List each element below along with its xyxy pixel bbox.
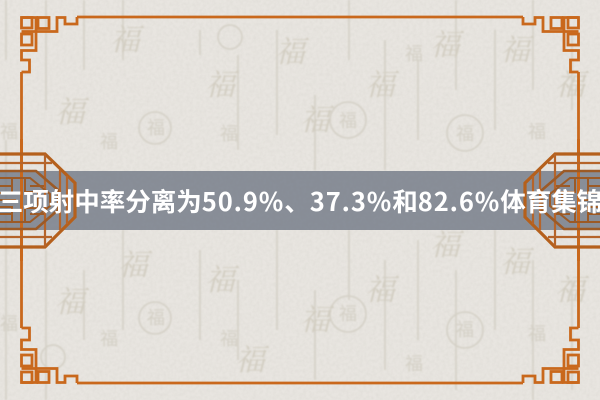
ornament: right lattice octagon	[525, 139, 600, 261]
paper background with watermark pattern: 福	[300, 104, 335, 137]
paper background with watermark pattern: 福	[147, 308, 165, 328]
paper background with watermark pattern: 福	[456, 124, 474, 144]
paper background with watermark pattern: 福	[55, 286, 90, 319]
paper background with watermark pattern: 福	[339, 111, 357, 131]
bottom edge	[77, 382, 523, 384]
paper background with watermark pattern: 福	[110, 24, 145, 57]
paper background with watermark pattern: 福	[235, 344, 270, 377]
paper background with watermark pattern: 福	[55, 96, 90, 129]
paper background with watermark pattern: 福	[430, 229, 465, 262]
paper background with watermark pattern: 福	[275, 36, 310, 69]
paper background with watermark pattern: 福	[405, 354, 423, 374]
paper background with watermark pattern: 福	[118, 249, 153, 282]
paper background with watermark pattern: 福	[500, 34, 535, 67]
paper background with watermark pattern: 福	[365, 274, 400, 307]
paper background with watermark pattern: 福	[528, 122, 546, 142]
corner: top left	[22, 17, 77, 72]
paper background with watermark pattern: 福	[528, 324, 546, 344]
paper background with watermark pattern: 福	[339, 304, 357, 324]
paper background with watermark pattern: 福	[555, 69, 590, 102]
paper background with watermark pattern: 福	[555, 274, 590, 307]
paper background with watermark pattern: 福	[0, 314, 18, 334]
paper background with watermark pattern: 福	[205, 69, 240, 102]
paper background with watermark pattern: 福	[365, 69, 400, 102]
paper background with watermark pattern: 福	[220, 329, 238, 349]
paper background with watermark pattern: 福	[430, 29, 465, 62]
corner: bottom left	[22, 328, 77, 383]
right edge	[577, 72, 580, 328]
paper background with watermark pattern: 福	[300, 304, 335, 337]
paper background with watermark pattern: 福	[0, 122, 18, 142]
corner: bottom right	[523, 328, 578, 383]
ornament: left lattice octagon	[0, 139, 75, 261]
paper background with watermark pattern: 福	[100, 329, 118, 349]
paper background with watermark pattern: 福	[147, 118, 165, 138]
paper background with watermark pattern: 福	[500, 246, 535, 279]
paper background with watermark pattern: 福	[205, 264, 240, 297]
left edge	[20, 72, 23, 328]
paper background with watermark pattern: 福	[100, 132, 118, 152]
paper background with watermark pattern: 福	[405, 44, 423, 64]
grey title band	[0, 171, 600, 230]
title text: 三项射中率分离为50.9%、37.3%和82.6%体育集锦	[0, 182, 600, 219]
top edge	[77, 16, 523, 18]
paper background with watermark pattern: 福	[220, 124, 238, 144]
paper background with watermark pattern: 福	[456, 320, 474, 340]
corner: top right	[523, 17, 578, 72]
